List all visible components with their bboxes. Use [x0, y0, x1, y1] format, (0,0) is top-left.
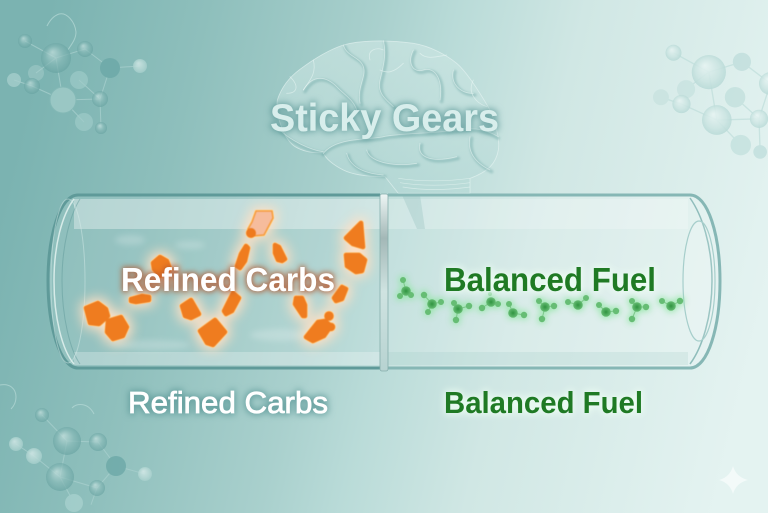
icon: sparkle: [719, 466, 748, 494]
icon: brain: [277, 41, 499, 193]
icon: molecule top left: [7, 14, 147, 134]
caption: Refined Carbs: Refined Carbs: [128, 385, 328, 420]
balanced fuel molecules: [397, 277, 683, 323]
refined carb particles: [86, 211, 365, 345]
caption: Balanced Fuel: Balanced Fuel: [444, 385, 643, 420]
icon: molecule top right: [653, 45, 768, 159]
tube divider: [380, 194, 388, 371]
label inside tube: Refined Carbs: Refined Carbs: [121, 261, 335, 298]
carb chunks: [86, 223, 365, 345]
icon: molecule bottom left: [0, 385, 152, 513]
tube outline: [48, 195, 720, 368]
carb cluster top: [246, 211, 273, 238]
title: Sticky Gears: Sticky Gears: [270, 97, 499, 140]
glass tube: [48, 194, 720, 371]
panel: tube right chamber: [388, 195, 720, 368]
label inside tube: Balanced Fuel: Balanced Fuel: [444, 261, 656, 298]
panel: tube left chamber: [48, 195, 380, 368]
